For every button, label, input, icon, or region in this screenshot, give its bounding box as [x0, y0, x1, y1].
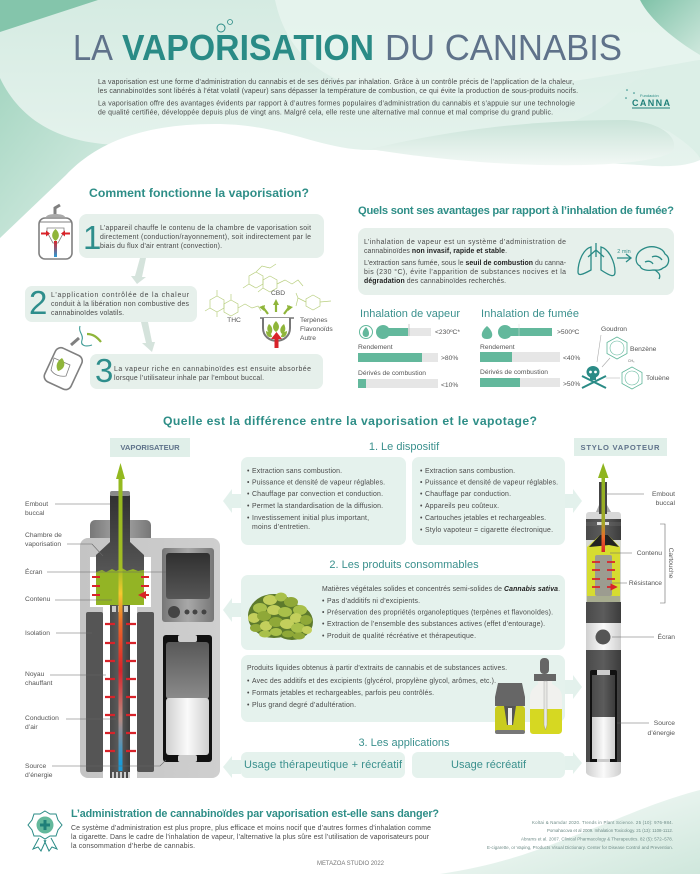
panel: solid products: Produit de qualité récréative et thérapeutique.: [327, 633, 476, 640]
panel: liquid products: [241, 655, 565, 722]
chart: smoke inhalation: [480, 324, 580, 388]
icon: dropper bottle: [530, 658, 562, 734]
chart: smoke inhalation: >50%: [563, 381, 580, 388]
vape pen labels: [606, 491, 676, 737]
vaporizer labels: Isolation: [25, 630, 50, 637]
panel: solid products: •: [322, 598, 325, 605]
panel: solid products: •: [322, 621, 325, 628]
logo: Fundación CANNA: Fundación: [640, 93, 659, 98]
chart: smoke inhalation: Dérivés de combustion: [480, 369, 548, 376]
panel: liquid products: •: [247, 690, 250, 697]
panel: device pen: Cartouches jetables et rechargeables.: [425, 515, 546, 522]
molecule labels: THC: [227, 317, 241, 324]
chart: smoke inhalation: >500ºC: [557, 329, 580, 336]
panel: step 1: [79, 214, 324, 258]
vaporizer labels: Embout: [25, 501, 48, 508]
icon: skull and toxic compounds: Goudron: [601, 326, 627, 333]
chart: vapour inhalation: Rendement: [358, 344, 393, 351]
vape pen labels: Embout: [652, 491, 675, 498]
icon: heated bowl with leaves: [259, 299, 294, 348]
icon: skull and toxic compounds: CH₃: [628, 359, 635, 363]
title: [73, 20, 622, 68]
label: vaporizer: VAPORISATEUR: [120, 443, 180, 452]
panel: device pen: [412, 457, 565, 545]
icon: cannabis bush: [248, 592, 313, 640]
safety text: la cigarette. Dans le cadre de l’inhalation de vapeur, l’alternative la plus sûre est l’utilisation de vaporisateurs pour: [71, 834, 430, 841]
references: Pomahacova et al 2009. Inhalation Toxicology. 21 (13): 1108-1112.: [547, 828, 673, 833]
panel: device pen: Extraction sans combustion.: [425, 468, 515, 475]
panel: device vaporizer: •: [247, 503, 250, 510]
panel: step 2: conduit à la libération non combustive des: [51, 301, 190, 308]
panel: solid products: •: [322, 633, 325, 640]
intro text: de qualité certifiée, développée depuis plus de vingt ans. Malgré cela, elle reste une alternative mal connue et mal comprise du grand public.: [98, 110, 553, 116]
vaporizer labels: Conduction: [25, 715, 59, 722]
chart: smoke inhalation: Rendement: [480, 344, 515, 351]
vaporizer labels: buccal: [25, 510, 45, 517]
panel: solid products: [241, 575, 565, 650]
vaporizer labels: [25, 501, 166, 779]
panel: usage therapeutic and recreational: Usage thérapeutique + récréatif: [244, 759, 403, 771]
icon: cartridge: [495, 683, 525, 734]
panel: device pen: Stylo vapoteur = cigarette électronique.: [425, 527, 553, 534]
panel: device vaporizer: Chauffage par convection et conduction.: [252, 491, 383, 498]
panel: step 3: lorsque l’utilisateur inhale par l’embout buccal.: [114, 375, 264, 382]
panel: liquid products: Formats jetables et rechargeables, parfois peu contrôlés.: [252, 690, 434, 697]
panel: step 3: 3: [95, 352, 113, 389]
panel: usage recreational: Usage récréatif: [451, 759, 527, 771]
panel: device pen: •: [420, 515, 423, 522]
logo: Fundación CANNA: [625, 89, 670, 108]
chart: vapour inhalation: Dérivés de combustion: [358, 370, 426, 377]
molecule: THC: [205, 290, 261, 317]
panel: device pen: Appareils peu coûteux.: [425, 503, 499, 510]
panel: device vaporizer: •: [247, 480, 250, 486]
vape pen labels: buccal: [656, 500, 676, 507]
vape pen labels: Écran: [658, 632, 675, 641]
molecule labels: Terpènes: [300, 317, 328, 324]
panel: device pen: Puissance et densité de vapeur réglables.: [425, 480, 558, 486]
panel: solid products: Extraction de l’ensemble des substances actives (effet d’entourage).: [327, 621, 545, 628]
arrow: step 2 to 3: [141, 322, 155, 352]
vaporizer labels: Contenu: [25, 596, 51, 603]
label: vape pen: [574, 438, 667, 456]
heading: device: 1. Le dispositif: [369, 441, 440, 453]
safety text: Ce système d’administration est plus propre, plus efficace et moins nocif que d’autres formes d’inhalation comme: [71, 825, 431, 832]
icon: medical badge: [28, 811, 62, 851]
heading: applications: 3. Les applications: [358, 737, 450, 749]
molecule: CBD: [243, 264, 303, 292]
title: DU CANNABIS: [385, 27, 622, 68]
vaporizer labels: Noyau: [25, 671, 45, 678]
panel: liquid products: Avec des additifs et des excipients (glycérol, propylène glycol, arômes, etc.).: [252, 678, 496, 685]
panel: liquid products: Plus grand degré d’adultération.: [252, 702, 356, 709]
heading: smoke inhalation: Inhalation de fumée: [481, 308, 579, 320]
title: LA: [73, 27, 113, 68]
panel: step 1: L’appareil chauffe le contenu de la chambre de vaporisation soit: [100, 225, 311, 232]
panel: device vaporizer: Extraction sans combustion.: [252, 468, 342, 475]
label: vaporizer: [110, 438, 190, 457]
panel: device pen: Chauffage par conduction.: [425, 491, 511, 498]
vape pen labels: Résistance: [629, 580, 662, 587]
panel: advantages text: cannabinoïdes non invasif, rapide et stable.: [364, 248, 507, 255]
intro text: les cannabinoïdes sont libérés à l’état volatil (vapeur) sans dépasser la température de combustion, ce qui évite la production de sous-produits nocifs.: [98, 88, 578, 95]
panel: device vaporizer: •: [247, 468, 250, 475]
panel: step 3: La vapeur riche en cannabinoïdes est ensuite absorbée: [114, 366, 311, 373]
panel: usage recreational: [412, 752, 565, 778]
icon: skull and toxic compounds: Benzène: [630, 346, 657, 353]
panel: step 2: 2: [29, 284, 47, 321]
panel: device vaporizer: [241, 457, 406, 545]
panel: step 1: biais du flux d’air entrant (convection).: [100, 243, 222, 250]
panel: advantages text: L’inhalation de vapeur est un système d’administration de: [364, 239, 566, 246]
chart: vapour inhalation: <230ºC*: [435, 329, 460, 336]
panel: solid products: Préservation des propriétés organoleptiques (terpènes et flavonoïdes).: [327, 610, 553, 616]
panel: device pen: •: [420, 527, 423, 534]
logo: Fundación CANNA: CANNA: [632, 98, 670, 108]
panel: device pen: •: [420, 480, 423, 486]
panel: advantages text: [358, 228, 674, 295]
intro text: La vaporisation est une forme d’administration du cannabis et de ses dérivés par inhalation. Grâce à un contrôle précis de l’application de la chaleur,: [98, 79, 574, 86]
panel: device pen: •: [420, 468, 423, 475]
chart: vapour inhalation: >80%: [441, 355, 458, 362]
vape pen labels: Cartouche: [667, 548, 674, 579]
panel: step 1: directement (conduction/rayonnement), soit indirectement par le: [100, 234, 311, 241]
heading: vaporization vs vaping: Quelle est la différence entre la vaporisation et le vapotage?: [163, 414, 537, 428]
heading: advantages: Quels sont ses avantages par rapport à l’inhalation de fumée?: [358, 205, 674, 217]
intro text: La vaporisation offre des avantages évidents par rapport à d’autres formes populaires d’administration du cannabis et s’appuie sur une technologie: [98, 100, 575, 108]
chart: vapour inhalation: [358, 324, 460, 389]
heading: vapour inhalation: Inhalation de vapeur: [360, 308, 460, 320]
molecule: terpene: [296, 293, 331, 310]
molecule labels: [227, 290, 333, 342]
panel: step 2: L’application contrôlée de la chaleur: [51, 292, 190, 299]
panel: device pen: •: [420, 503, 423, 510]
panel: device pen: •: [420, 491, 423, 498]
panel: step 1: 1: [83, 219, 101, 256]
panel: advantages text: L’extraction sans fumée, sous le seuil de combustion du canna-: [364, 260, 566, 267]
panel: liquid products: •: [247, 678, 250, 685]
vaporizer labels: d’air: [25, 724, 38, 731]
label: vape pen: STYLO VAPOTEUR: [580, 443, 660, 452]
panel: advantages text: bis (230 °C), évite l’apparition de substances nocives et la: [364, 268, 566, 276]
icon: lungs to brain: 2 min: [617, 249, 631, 255]
safety text: la consommation d’herbe de cannabis.: [71, 843, 195, 850]
panel: liquid products: Produits liquides obtenus à partir d’extraits de cannabis et de substances actives.: [247, 665, 507, 672]
panel: solid products: Matières végétales solides et concentrés semi-solides de Cannabis sativa.: [322, 586, 560, 593]
references: [487, 820, 673, 850]
arrows: comparison connectors: [223, 489, 582, 778]
title: VAPORISATION: [122, 27, 374, 68]
molecule labels: CBD: [271, 290, 285, 297]
vape pen labels: Contenu: [637, 550, 662, 557]
icon: skull and toxic compounds: [582, 326, 670, 389]
chart: smoke inhalation: <40%: [563, 355, 580, 362]
arrow: step 1 to 2: [131, 258, 146, 284]
diagram: vape pen: [586, 463, 621, 778]
vaporizer labels: Écran: [25, 567, 43, 576]
panel: solid products: •: [322, 610, 325, 616]
panel: device vaporizer: Permet la standardisation de la diffusion.: [252, 503, 383, 510]
molecule labels: Autre: [300, 335, 316, 342]
references: E-cigarette, or Vaping, Products Visual Dictionary. Center for Disease Control and Prevention.: [487, 845, 673, 850]
safety text: [71, 825, 431, 850]
icon: vaporizer inhalation: [42, 326, 101, 392]
panel: solid products: Pas d’additifs ni d’excipients.: [327, 598, 420, 605]
panel: device vaporizer: moins d’entretien.: [252, 524, 310, 531]
panel: advantages text: dégradation des cannabinoïdes recherchés.: [364, 278, 506, 285]
vape pen labels: Source: [654, 720, 675, 727]
icon: skull and toxic compounds: Toluène: [646, 375, 670, 382]
panel: liquid products: •: [247, 702, 250, 709]
heading: safety: L’administration de cannabinoïdes par vaporisation est-elle sans danger?: [71, 808, 439, 820]
icon: vaporizer heating: [39, 205, 72, 259]
vaporizer labels: d’énergie: [25, 772, 53, 779]
vaporizer labels: chauffant: [25, 680, 53, 687]
heading: consumables: 2. Les produits consommables: [329, 559, 479, 571]
heading: how it works: Comment fonctionne la vaporisation?: [89, 186, 309, 200]
diagram: vaporizer: [80, 463, 220, 778]
vaporizer labels: Source: [25, 763, 46, 770]
panel: step 3: [90, 352, 323, 389]
credit: METAZOA STUDIO 2022: [317, 861, 385, 867]
intro text: [98, 79, 578, 116]
panel: device vaporizer: Investissement initial plus important,: [252, 515, 369, 522]
chart: vapour inhalation: <10%: [441, 382, 458, 389]
molecule labels: Flavonoïds: [300, 326, 333, 333]
panel: device vaporizer: •: [247, 491, 250, 498]
vaporizer labels: vaporisation: [25, 541, 61, 548]
panel: usage therapeutic and recreational: [241, 752, 405, 778]
references: Koltai & Namdar 2020. Trends in Plant Science. 25 (10): 976-984.: [532, 820, 673, 825]
vaporizer labels: Chambre de: [25, 532, 62, 539]
panel: device vaporizer: •: [247, 515, 250, 522]
panel: step 2: [25, 284, 197, 322]
panel: step 2: cannabinoïdes volatils.: [51, 310, 124, 317]
references: Abrams et al. 2007. Clinical Pharmacology & Therapeutics. 82 (5): 572–578.: [521, 836, 673, 842]
panel: device vaporizer: Puissance et densité de vapeur réglables.: [252, 480, 385, 486]
vape pen labels: d’énergie: [647, 730, 675, 737]
icon: lungs to brain: [578, 243, 669, 279]
